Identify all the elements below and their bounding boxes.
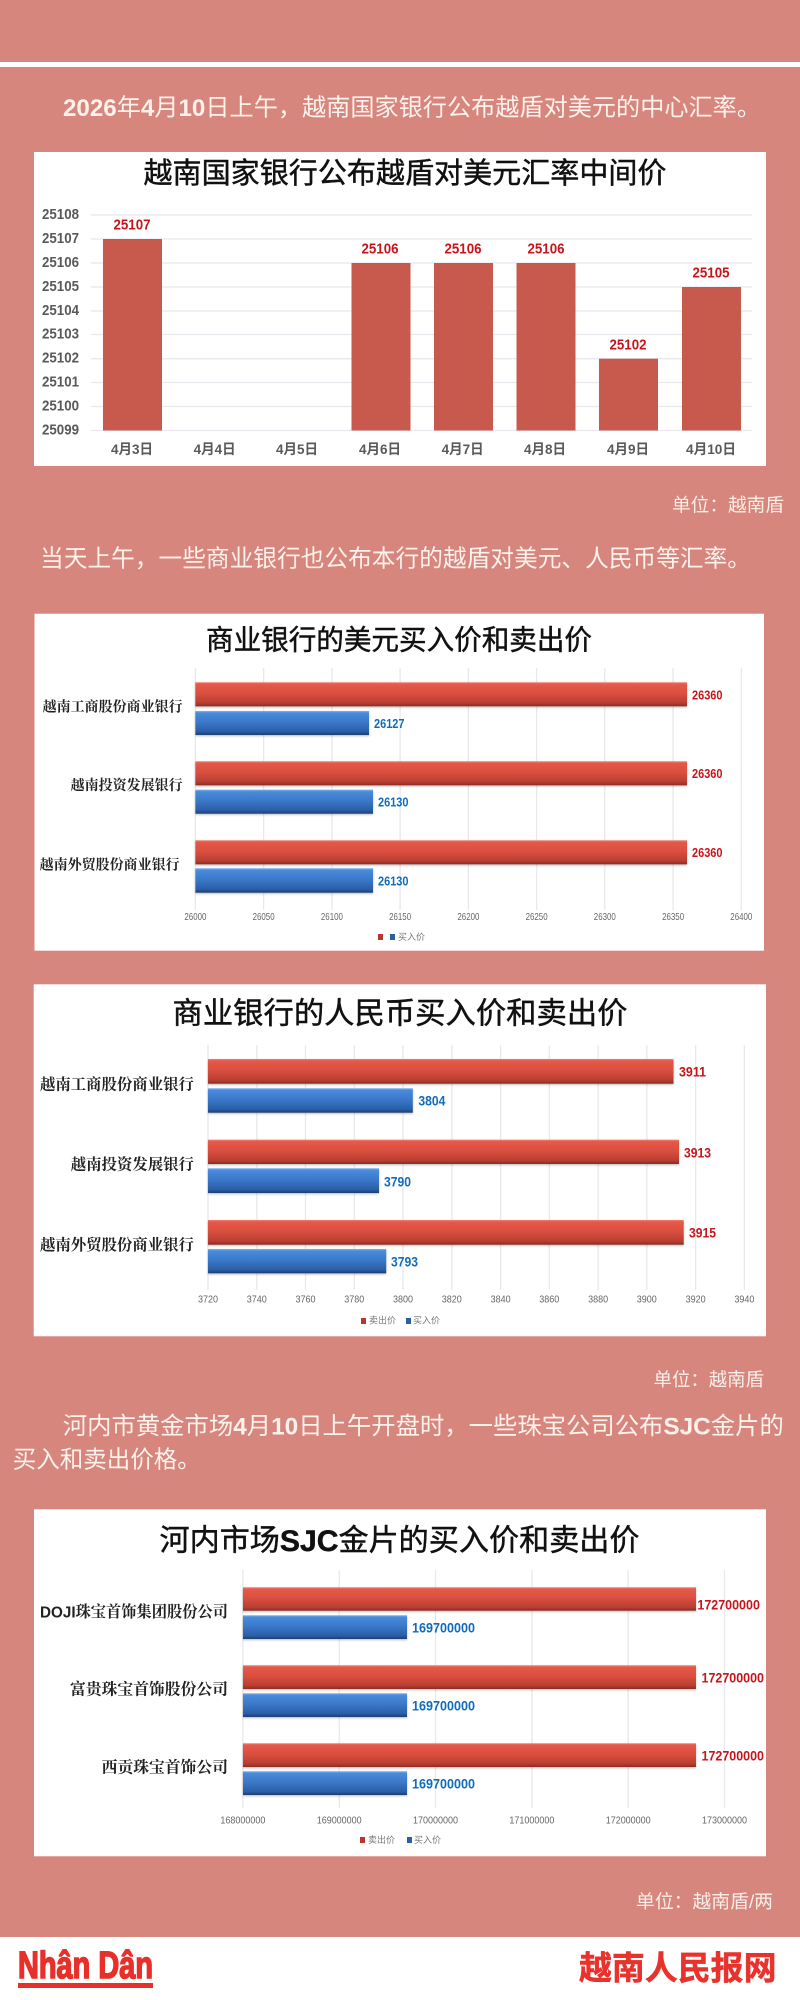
panel: central rate column chart xyxy=(34,152,766,466)
y axis labels: 25104 xyxy=(42,303,79,319)
data labels: 25106 xyxy=(362,242,398,258)
category labels: 富贵珠宝首饰股份公司 xyxy=(70,1680,228,1698)
data labels: 169700000 xyxy=(412,1776,475,1792)
y axis labels: 25106 xyxy=(42,255,79,271)
data labels: 25105 xyxy=(692,266,730,282)
axis ticks: 3900 xyxy=(637,1293,657,1305)
data labels: 26127 xyxy=(374,716,404,731)
axis ticks: 3860 xyxy=(539,1293,559,1305)
gridlines xyxy=(208,1045,744,1290)
axis ticks: 26200 xyxy=(457,911,480,923)
data labels: 172700000 xyxy=(702,1669,764,1685)
y axis labels: 25102 xyxy=(42,351,79,367)
legend: 卖出价 xyxy=(368,1834,395,1845)
data labels: 169700000 xyxy=(412,1619,475,1635)
data labels: 172700000 xyxy=(697,1597,760,1613)
y axis labels: 25105 xyxy=(42,279,79,295)
x axis labels: 4月3日 xyxy=(111,441,153,457)
bars xyxy=(103,239,741,430)
axis ticks: 26050 xyxy=(253,911,275,923)
paragraph: gold market: 河内市黄金市场4月10日上午开盘时，一些珠宝公司公布SJC金片的 xyxy=(63,1413,784,1440)
legend: 卖出价 xyxy=(369,1315,396,1326)
y axis labels: 25100 xyxy=(42,398,79,414)
chart title: 商业银行的美元买入价和卖出价 xyxy=(206,624,592,656)
axis ticks xyxy=(220,1815,747,1827)
x axis labels: 4月5日 xyxy=(276,441,318,457)
y axis labels: 25108 xyxy=(42,207,79,223)
panel: RMB buy and sell chart xyxy=(34,984,766,1336)
y axis labels: 25107 xyxy=(42,231,79,247)
intro text: commercial banks: 当天上午，一些商业银行也公布本行的越盾对美元、人民币等汇率。 xyxy=(40,546,751,572)
axis ticks: 26250 xyxy=(526,911,548,923)
bars xyxy=(208,1059,684,1273)
axis ticks: 26150 xyxy=(389,911,411,923)
axis ticks: 173000000 xyxy=(702,1815,747,1827)
data labels: 169700000 xyxy=(412,1698,475,1714)
data labels: 3913 xyxy=(684,1144,711,1160)
category labels: 越南外贸股份商业银行 xyxy=(40,1235,194,1254)
axis ticks: 26300 xyxy=(594,911,616,923)
legend: 买入价 xyxy=(398,932,425,942)
axis ticks: 3800 xyxy=(393,1293,413,1305)
axis ticks xyxy=(184,911,752,923)
category labels xyxy=(40,1602,228,1776)
data labels xyxy=(374,688,722,888)
panel: SJC gold chart xyxy=(34,1509,766,1856)
category labels: 西贡珠宝首饰公司 xyxy=(102,1758,228,1776)
category labels: 越南投资发展银行 xyxy=(71,1154,194,1174)
x axis labels: 4月7日 xyxy=(442,441,484,457)
axis ticks: 3740 xyxy=(247,1293,267,1305)
data labels: 3915 xyxy=(689,1225,716,1241)
legend xyxy=(378,932,425,942)
axis ticks: 3880 xyxy=(588,1293,608,1305)
data labels: 25107 xyxy=(114,218,150,234)
footer xyxy=(0,1937,800,2000)
logo: Nhan Dan: Nhân Dân xyxy=(18,1945,153,1987)
data labels: 25106 xyxy=(528,242,564,258)
bars xyxy=(243,1587,696,1795)
category labels: 越南投资发展银行 xyxy=(71,777,183,794)
axis ticks: 3940 xyxy=(734,1293,755,1305)
x axis labels: 4月4日 xyxy=(194,441,236,457)
chart title: 河内市场SJC金片的买入价和卖出价 xyxy=(160,1524,640,1558)
y axis labels: 25101 xyxy=(42,374,79,390)
data labels: 3790 xyxy=(384,1173,411,1189)
data labels: 26130 xyxy=(378,874,408,888)
data labels: 26360 xyxy=(692,845,722,860)
gridlines xyxy=(195,668,741,910)
y axis labels xyxy=(42,207,79,438)
paragraph: gold market xyxy=(13,1413,784,1474)
axis ticks: 26400 xyxy=(730,911,752,923)
legend: 买入价 xyxy=(414,1835,441,1845)
chart title: 商业银行的人民币买入价和卖出价 xyxy=(172,998,628,1030)
x axis labels: 4月8日 xyxy=(524,441,566,457)
legend: 买入价 xyxy=(413,1316,440,1326)
x axis labels: 4月6日 xyxy=(359,441,401,457)
axis ticks: 171000000 xyxy=(509,1815,555,1827)
axis ticks: 3720 xyxy=(198,1293,218,1305)
data labels xyxy=(114,218,730,354)
category labels: 越南工商股份商业银行 xyxy=(43,698,183,716)
axis ticks: 3820 xyxy=(442,1293,462,1305)
axis ticks: 26350 xyxy=(662,911,684,923)
data labels: 3804 xyxy=(418,1092,446,1108)
category labels: 越南工商股份商业银行 xyxy=(40,1074,194,1094)
axis ticks: 172000000 xyxy=(606,1815,651,1827)
category labels xyxy=(40,698,183,874)
axis ticks: 26000 xyxy=(184,911,207,923)
axis ticks: 3840 xyxy=(491,1293,511,1305)
axis ticks: 170000000 xyxy=(413,1815,458,1827)
intro text: central rate: 2026年4月10日上午，越南国家银行公布越盾对美元的中心汇率。 xyxy=(63,94,761,122)
bars xyxy=(195,682,687,893)
paragraph: gold market: 买入和卖出价格。 xyxy=(13,1446,201,1474)
unit note 2: 单位：越南盾 xyxy=(654,1369,764,1390)
data labels xyxy=(384,1063,716,1270)
x axis labels: 4月9日 xyxy=(607,441,649,457)
data labels: 3911 xyxy=(679,1063,706,1079)
data labels xyxy=(412,1597,764,1792)
top white divider xyxy=(0,62,800,67)
axis ticks: 169000000 xyxy=(317,1815,362,1827)
unit note 1: 单位：越南盾 xyxy=(672,494,784,516)
data labels: 26360 xyxy=(692,688,722,702)
axis ticks xyxy=(198,1293,755,1305)
chart title: 越南国家银行公布越盾对美元汇率中间价 xyxy=(144,157,666,190)
x axis labels: 4月10日 xyxy=(686,441,736,457)
legend xyxy=(361,1315,440,1326)
y axis labels: 25103 xyxy=(42,326,79,342)
data labels: 25102 xyxy=(610,338,646,354)
category labels xyxy=(40,1074,194,1254)
data labels: 172700000 xyxy=(702,1748,764,1764)
axis ticks: 168000000 xyxy=(220,1815,266,1827)
gridlines xyxy=(243,1570,724,1808)
gridlines xyxy=(91,215,752,430)
data labels: 26130 xyxy=(378,794,408,810)
axis ticks: 3920 xyxy=(686,1293,706,1305)
data labels: 3793 xyxy=(391,1254,418,1270)
x axis labels xyxy=(111,441,736,457)
data labels: 25106 xyxy=(444,242,482,258)
unit note 3: 单位：越南盾/两 xyxy=(636,1891,773,1912)
category labels: 越南外贸股份商业银行 xyxy=(40,856,180,874)
legend xyxy=(360,1834,441,1845)
axis ticks: 3780 xyxy=(344,1293,364,1305)
site name: 越南人民报网 xyxy=(579,1950,776,1986)
data labels: 26360 xyxy=(692,766,722,781)
category labels: DOJI珠宝首饰集团股份公司 xyxy=(40,1602,228,1621)
panel: USD buy and sell chart xyxy=(34,614,764,951)
y axis labels: 25099 xyxy=(42,422,79,438)
axis ticks: 26100 xyxy=(321,911,343,923)
axis ticks: 3760 xyxy=(296,1293,316,1305)
